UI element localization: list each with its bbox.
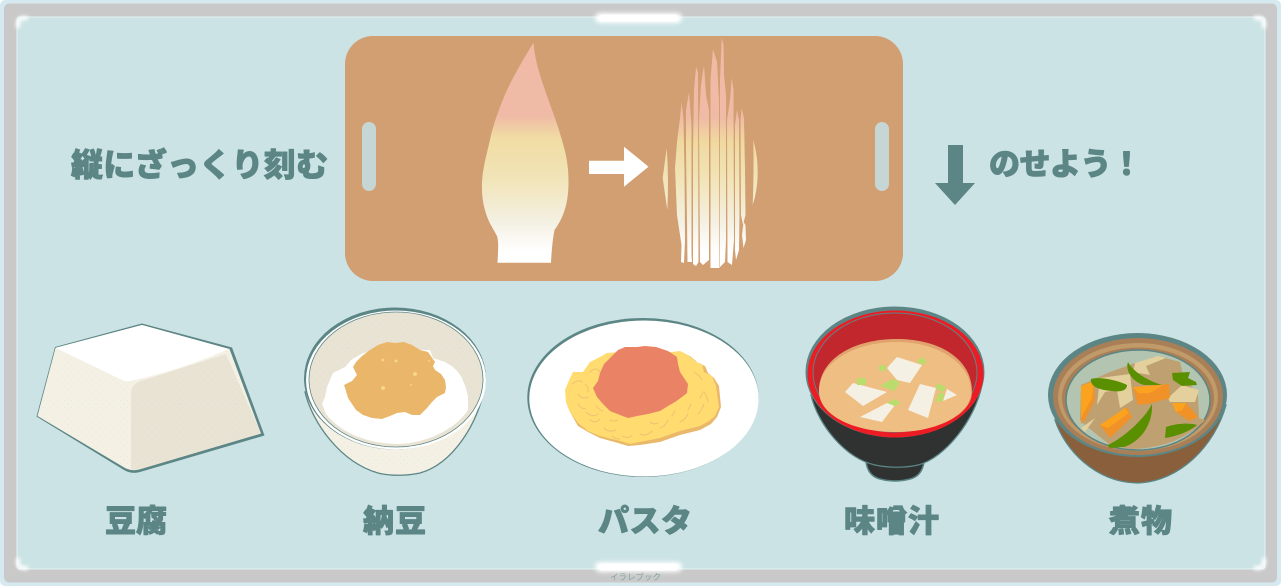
- heading: place on top: のせよう！: [989, 147, 1142, 182]
- label: tofu: 豆腐: [105, 504, 167, 539]
- tofu body and left face: [38, 325, 261, 470]
- board handle left: [362, 122, 376, 191]
- label: natto: 納豆: [363, 504, 426, 539]
- vegetables beige: [1080, 358, 1205, 449]
- tofu cubes: [845, 357, 957, 422]
- heading: cut lengthwise: 縦にざっくり刻む: [71, 147, 328, 183]
- arrow right: [589, 147, 648, 187]
- tofu right face: [131, 354, 261, 470]
- arrow down: [935, 145, 975, 205]
- carrot highlights: [1081, 381, 1186, 428]
- bowl rim red: [808, 310, 984, 438]
- tofu top face: [56, 325, 229, 381]
- bowl inside: [813, 313, 977, 432]
- credit text: イラレブック: [610, 572, 661, 582]
- tofu pieces: [1081, 356, 1199, 432]
- miso soup: [819, 339, 972, 432]
- cutting board panel: [345, 36, 903, 281]
- carrots: [1081, 381, 1198, 438]
- tomato sauce: [593, 346, 688, 418]
- green onions: [857, 357, 946, 406]
- pasta plate illustration: [527, 318, 759, 477]
- label: miso soup: 味噌汁: [844, 504, 939, 539]
- bowl body: [1055, 405, 1226, 483]
- bowl rim teal: [806, 306, 984, 438]
- label: pasta: パスタ: [598, 504, 692, 539]
- snow peas: [1091, 362, 1197, 448]
- label: simmered dish: 煮物: [1109, 504, 1172, 539]
- bowl foot: [866, 462, 924, 481]
- plate: [527, 318, 759, 477]
- bowl body: [811, 385, 982, 467]
- whole bamboo shoot: [482, 43, 568, 263]
- simmered dish illustration: [1048, 333, 1227, 483]
- board handle right: [875, 122, 889, 191]
- bowl rim: [1048, 333, 1227, 457]
- pasta underside: [566, 353, 721, 446]
- pasta: [565, 351, 719, 444]
- bowl rim: [304, 308, 486, 450]
- pasta strands: [572, 369, 708, 439]
- bowl body: [305, 385, 485, 475]
- sliced bamboo shoot: [663, 38, 758, 268]
- bowl inside: [1066, 350, 1210, 450]
- natto rice bowl illustration: [304, 308, 486, 475]
- tofu illustration: [36, 324, 264, 473]
- natto: [344, 342, 446, 419]
- rice: [322, 350, 468, 444]
- miso soup illustration: [806, 306, 984, 481]
